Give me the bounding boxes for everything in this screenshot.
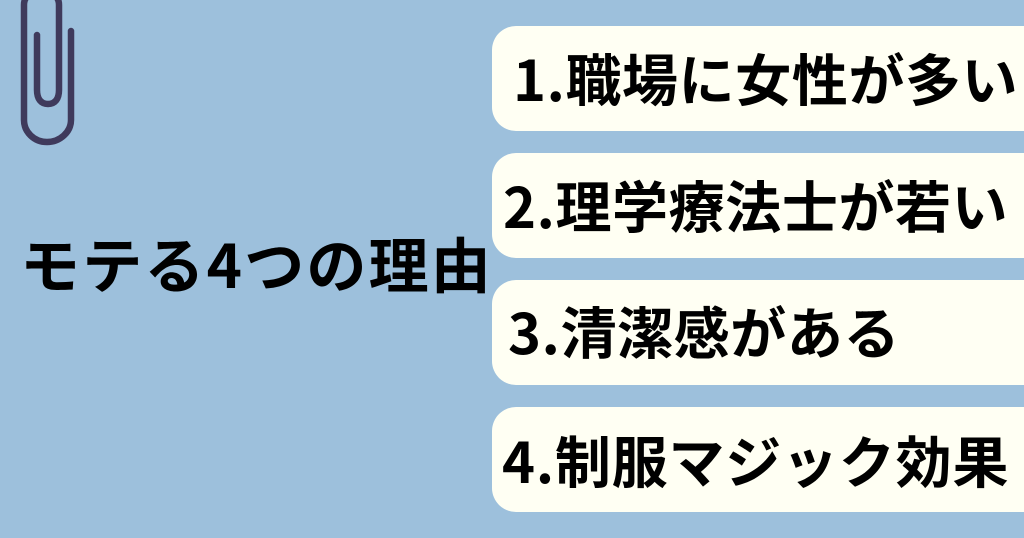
panel: reason 4 (492, 407, 1024, 512)
panel: reason 1 (492, 26, 1024, 131)
text: reason 2: 2.理学療法士が若い (503, 164, 1008, 245)
heading: モテる4つの理由 (20, 219, 493, 306)
panel: reason 2 (492, 153, 1024, 258)
text: reason 3: 3.清潔感がある (508, 290, 900, 371)
text: reason 4: 4.制服マジック効果 (502, 419, 1009, 500)
panel: reason 3 (492, 280, 1024, 385)
text: reason 1: 1.職場に女性が多い (513, 37, 1018, 118)
icon: paperclip (20, 0, 74, 146)
